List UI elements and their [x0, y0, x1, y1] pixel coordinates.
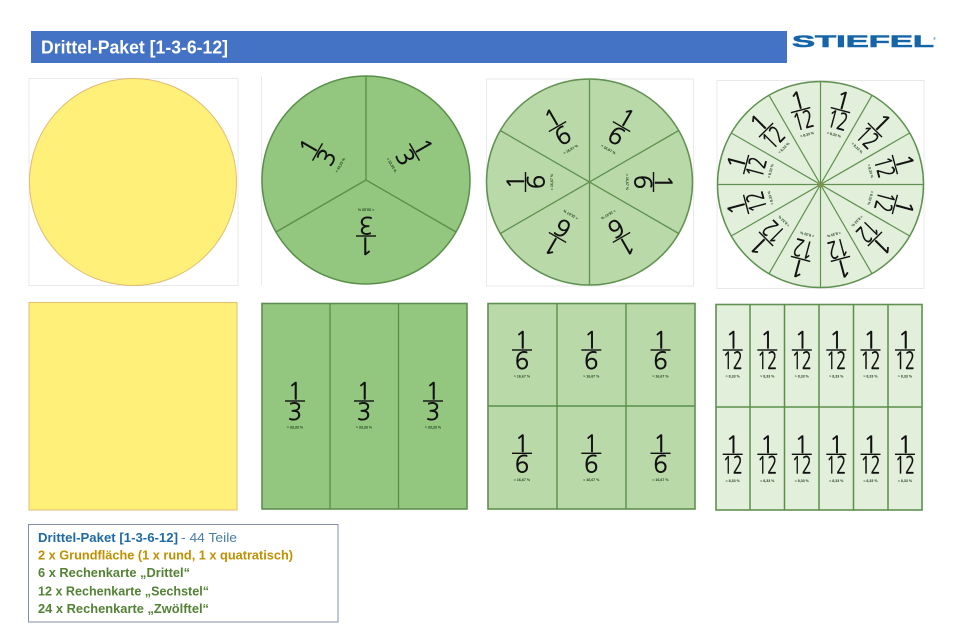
fraction 1/3: 3	[288, 401, 302, 424]
fraction 1/12: 12	[852, 123, 882, 153]
panel: yellow base square	[29, 302, 237, 510]
fraction 1/12: 1	[726, 330, 740, 352]
fraction 1/6	[650, 433, 670, 482]
fraction 1/6: 1	[584, 330, 598, 352]
fraction 1/6: 1	[653, 330, 668, 352]
fraction 1/6: 6	[584, 350, 598, 373]
fraction 1/12	[848, 108, 897, 157]
fraction 1/12: 12	[825, 108, 850, 135]
fraction 1/12: ≈ 8,33 %	[760, 374, 775, 378]
fraction 1/12	[724, 150, 775, 181]
fraction 1/3 top left: 3	[314, 146, 341, 170]
fraction 1/12: 1	[833, 88, 853, 114]
fraction 1/6	[505, 172, 554, 192]
fraction 1/6: ≈ 16,67 %	[600, 209, 616, 221]
fraction 1/12: 1	[726, 434, 740, 457]
fraction 1/3 top right: ≈ 33,33 %	[386, 157, 398, 174]
fraction 1/12: 12	[791, 108, 816, 135]
fraction 1/6: 6	[630, 175, 654, 189]
fraction 1/6: 1	[505, 175, 528, 189]
fraction 1/12	[786, 88, 817, 139]
fraction 1/6	[581, 330, 601, 378]
fraction 1/3	[423, 380, 443, 430]
fraction 1/3: 1	[426, 380, 440, 404]
fraction 1/12	[895, 434, 915, 483]
fraction 1/3: ≈ 33,33 %	[356, 426, 373, 430]
fraction 1/12: 1	[795, 434, 809, 457]
fraction 1/12: 12	[744, 189, 771, 214]
legend line: package name: - 44 Teile	[181, 530, 237, 545]
fraction 1/12: ≈ 8,33 %	[767, 163, 775, 179]
fraction 1/6: 1	[515, 330, 529, 352]
fraction 1/6: 1	[541, 105, 565, 132]
fraction 1/6: 1	[515, 433, 529, 456]
legend line: package name: Drittel-Paket [1-3-6-12]	[38, 530, 178, 545]
fraction 1/12	[866, 188, 917, 219]
fraction 1/12: 12	[791, 234, 816, 261]
fraction 1/12: 12	[852, 216, 882, 246]
fraction 1/12	[786, 230, 817, 281]
fraction 1/12: 1	[788, 88, 808, 114]
fraction 1/6: 6	[584, 453, 598, 476]
fraction 1/12: 12	[792, 350, 812, 373]
fraction 1/3: 3	[426, 401, 440, 424]
fraction 1/12: 12	[757, 350, 777, 373]
panel: circle divided in sixths	[486, 79, 694, 286]
fraction 1/12: ≈ 8,33 %	[850, 214, 863, 228]
fraction 1/6: ≈ 16,67 %	[652, 478, 669, 482]
fraction 1/12: 12	[895, 350, 915, 373]
fraction 1/6: 1	[584, 433, 598, 456]
fraction 1/12	[757, 330, 777, 378]
fraction 1/12	[723, 330, 743, 378]
fraction 1/6: 6	[653, 453, 668, 476]
fraction 1/3 top left	[295, 133, 347, 175]
fraction 1/12	[860, 330, 880, 378]
fraction 1/12: 1	[898, 434, 912, 457]
fraction 1/12: ≈ 8,33 %	[778, 141, 791, 155]
fraction 1/3 top right: 3	[391, 146, 418, 170]
fraction 1/3: ≈ 33,33 %	[425, 426, 442, 430]
panel: square divided in thirds	[262, 304, 467, 509]
fraction 1/12: ≈ 8,33 %	[777, 214, 791, 227]
fraction 1/12	[744, 212, 793, 261]
fraction 1/3 bottom	[356, 208, 376, 256]
fraction 1/3	[354, 380, 374, 430]
fraction 1/6	[599, 104, 640, 156]
fraction 1/6: 6	[515, 350, 529, 373]
fraction 1/12: 12	[860, 454, 880, 477]
fraction 1/6: ≈ 16,67 %	[600, 144, 617, 156]
logo: Stiefel	[792, 32, 936, 51]
fraction 1/12: 12	[723, 454, 743, 477]
fraction 1/6	[599, 208, 640, 260]
fraction 1/6: ≈ 16,67 %	[625, 174, 629, 191]
fraction 1/12: 12	[870, 189, 897, 214]
fraction 1/12: 12	[826, 350, 846, 373]
fraction 1/6: ≈ 16,67 %	[514, 478, 531, 482]
legend: package contents	[28, 524, 338, 622]
fraction 1/12: 12	[759, 123, 789, 153]
fraction 1/12	[757, 434, 777, 483]
fraction 1/12: 1	[891, 152, 917, 172]
fraction 1/12	[895, 330, 915, 378]
fraction 1/12: ≈ 8,33 %	[767, 190, 775, 205]
fraction 1/12	[826, 330, 846, 378]
fraction 1/6: ≈ 16,67 %	[583, 374, 600, 378]
fraction 1/12	[792, 434, 812, 483]
fraction 1/6: 6	[551, 123, 575, 150]
fraction 1/6: 1	[653, 433, 668, 456]
fraction 1/3 top left: ≈ 33,33 %	[335, 157, 347, 173]
fraction 1/12: ≈ 8,33 %	[726, 374, 741, 378]
fraction 1/12: 1	[795, 330, 809, 352]
fraction 1/3: ≈ 33,33 %	[287, 426, 304, 430]
fraction 1/6	[512, 330, 532, 378]
fraction 1/12: ≈ 8,33 %	[826, 230, 841, 238]
fraction 1/12: 12	[895, 454, 915, 477]
fraction 1/12: 12	[759, 216, 789, 246]
fraction 1/12: ≈ 8,33 %	[795, 479, 810, 483]
fraction 1/12: 1	[829, 330, 843, 352]
fraction 1/12	[744, 108, 793, 157]
fraction 1/12: ≈ 8,33 %	[800, 131, 815, 139]
fraction 1/6	[625, 172, 674, 192]
fraction 1/12: 1	[747, 111, 773, 137]
fraction 1/12: 1	[829, 434, 843, 457]
fraction 1/6: ≈ 16,67 %	[563, 143, 579, 155]
fraction 1/12	[824, 88, 855, 139]
fraction 1/6: ≈ 16,67 %	[562, 208, 579, 220]
fraction 1/3 top right	[385, 133, 437, 175]
fraction 1/12: 1	[898, 330, 912, 352]
fraction 1/12: 1	[868, 111, 894, 137]
fraction 1/12	[860, 434, 880, 483]
fraction 1/12: 1	[724, 152, 750, 172]
panel: circle divided in twelfths	[717, 80, 924, 288]
fraction 1/12	[824, 230, 855, 281]
fraction 1/12: ≈ 8,33 %	[829, 479, 844, 483]
fraction 1/12: 12	[744, 155, 771, 180]
fraction 1/12: ≈ 8,33 %	[898, 374, 913, 378]
fraction 1/12: ≈ 8,33 %	[866, 190, 874, 206]
fraction 1/3: 1	[288, 380, 302, 404]
fraction 1/6	[650, 330, 670, 378]
fraction 1/6: 6	[604, 214, 628, 241]
fraction 1/12	[792, 330, 812, 378]
fraction 1/12: ≈ 8,33 %	[863, 479, 878, 483]
fraction 1/6: 1	[541, 232, 565, 259]
fraction 1/12: 1	[788, 255, 808, 281]
fraction 1/6: 1	[614, 105, 638, 132]
fraction 1/6: ≈ 16,67 %	[550, 173, 554, 190]
fraction 1/6: 6	[526, 175, 548, 189]
panel: circle divided in thirds	[262, 76, 470, 285]
logo: Stiefel: STIEFEL	[792, 32, 934, 51]
fraction 1/12: ≈ 8,33 %	[726, 479, 741, 483]
legend line: sixths: 12 x Rechenkarte „Sechstel“	[38, 584, 209, 598]
fraction 1/6	[512, 433, 532, 482]
fraction 1/3 bottom: 1	[359, 234, 373, 256]
fraction 1/6: 6	[604, 123, 628, 150]
panel: yellow base circle	[29, 78, 238, 286]
fraction 1/3 bottom: ≈ 33,33 %	[357, 208, 374, 212]
fraction 1/6: 6	[653, 350, 668, 373]
fraction 1/12: 1	[833, 255, 853, 281]
logo: Stiefel: ®	[933, 36, 936, 41]
fraction 1/12: 12	[757, 454, 777, 477]
legend line: base areas: 2 x Grundfläche (1 x rund, 1 x quatratisch)	[38, 548, 293, 562]
fraction 1/12: 1	[724, 197, 750, 217]
fraction 1/12: 1	[863, 330, 878, 352]
fraction 1/12: 12	[870, 155, 897, 180]
legend line: package name	[38, 530, 237, 545]
fraction 1/12: ≈ 8,33 %	[829, 374, 844, 378]
fraction 1/3	[285, 380, 305, 430]
fraction 1/12: ≈ 8,33 %	[863, 374, 878, 378]
fraction 1/3: 1	[357, 380, 371, 404]
fraction 1/12	[826, 434, 846, 483]
legend line: twelfths: 24 x Rechenkarte „Zwölftel“	[38, 601, 209, 616]
fraction 1/3 bottom: 3	[359, 213, 373, 236]
fraction 1/12: ≈ 8,33 %	[799, 230, 815, 238]
fraction 1/3 top left: 1	[296, 136, 323, 159]
fraction 1/6	[539, 208, 580, 260]
legend line: thirds: 6 x Rechenkarte „Drittel“	[38, 565, 190, 580]
fraction 1/6	[581, 433, 601, 482]
fraction 1/12: 12	[825, 234, 850, 261]
panel: square divided in sixths	[488, 304, 695, 509]
fraction 1/12: ≈ 8,33 %	[826, 131, 842, 139]
fraction 1/12: 12	[723, 350, 743, 373]
fraction 1/12	[866, 150, 917, 181]
fraction 1/12: 12	[792, 454, 812, 477]
fraction 1/12	[724, 188, 775, 219]
fraction 1/12: 1	[747, 232, 773, 258]
fraction 1/6: ≈ 16,67 %	[583, 478, 600, 482]
fraction 1/12: ≈ 8,33 %	[866, 164, 874, 179]
fraction 1/12: 1	[891, 197, 917, 217]
fraction 1/6: ≈ 16,67 %	[514, 374, 531, 378]
fraction 1/12: ≈ 8,33 %	[898, 479, 913, 483]
fraction 1/6: 6	[515, 453, 529, 476]
fraction 1/12: 1	[863, 434, 878, 457]
fraction 1/3: 3	[357, 401, 371, 424]
fraction 1/12: ≈ 8,33 %	[850, 142, 864, 155]
fraction 1/6: ≈ 16,67 %	[652, 374, 669, 378]
fraction 1/12: 12	[860, 350, 880, 373]
fraction 1/12: 1	[760, 330, 774, 352]
fraction 1/12: ≈ 8,33 %	[795, 374, 810, 378]
fraction 1/12	[848, 212, 897, 261]
fraction 1/6: 1	[651, 175, 674, 189]
fraction 1/12: 1	[868, 232, 894, 258]
fraction 1/6: 1	[614, 232, 638, 259]
fraction 1/12: 1	[760, 434, 774, 457]
fraction 1/6	[539, 104, 580, 156]
fraction 1/12: 12	[826, 454, 846, 477]
fraction 1/3 top right: 1	[409, 136, 436, 159]
title banner	[31, 31, 787, 63]
fraction 1/12: ≈ 8,33 %	[760, 479, 775, 483]
panel: square divided in twelfths	[716, 304, 922, 510]
fraction 1/6: 6	[551, 214, 575, 241]
title banner: Drittel-Paket [1-3-6-12]	[41, 36, 228, 58]
fraction 1/12	[723, 434, 743, 483]
